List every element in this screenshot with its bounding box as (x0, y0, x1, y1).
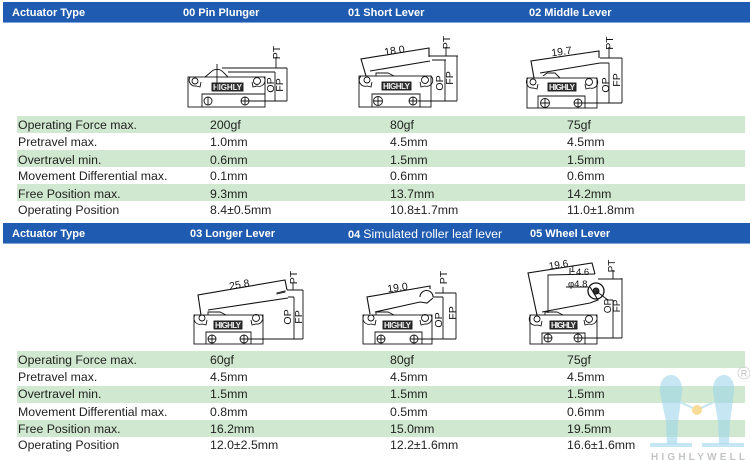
table: top specifications: 0.6mm (390, 169, 428, 183)
diagram: 05 wheel lever: HIGHLY (551, 321, 577, 330)
table: top specifications: 8.4±0.5mm (210, 203, 271, 217)
diagram: 01 short lever: PT (441, 35, 453, 49)
diagram: 04 simulated roller leaf lever: FP (447, 306, 459, 320)
header bar: bottom actuator types: 03 Longer Lever (190, 228, 275, 240)
header bar: top actuator types (3, 2, 750, 23)
table: bottom specifications: 4.5mm (390, 370, 428, 384)
diagram: 05 wheel lever: FP (612, 299, 623, 312)
diagram: 05 wheel lever: OP (603, 298, 614, 313)
diagram: 00 pin plunger: PT (271, 45, 283, 59)
table: bottom specifications: 16.2mm (210, 422, 254, 436)
diagram: 02 middle lever: HIGHLY (549, 83, 576, 92)
table: bottom specifications: 1.5mm (210, 387, 248, 401)
table: top specifications: Pretravel max. (18, 135, 97, 149)
header bar: bottom actuator types (3, 223, 750, 244)
table: top specifications: 1.5mm (390, 153, 428, 167)
table: top specifications: 1.5mm (567, 153, 605, 167)
header bar: top actuator types: 02 Middle Lever (529, 7, 612, 19)
table: top specifications: 10.8±1.7mm (390, 203, 458, 217)
header bar: top actuator types: 01 Short Lever (348, 7, 424, 19)
diagram: 01 short lever: HIGHLY (383, 82, 411, 91)
table: bottom specifications (17, 351, 745, 452)
diagram: 01 short lever: OP (434, 75, 446, 91)
table: bottom specifications: 0.8mm (210, 405, 248, 419)
table: bottom specifications: 0.6mm (567, 405, 605, 419)
diagram: 05 wheel lever: φ4.8 (568, 279, 587, 290)
table: bottom specifications: 60gf (210, 353, 234, 367)
table: top specifications: 4.5mm (567, 135, 605, 149)
table: top specifications: Overtravel min. (18, 153, 101, 167)
diagram: 00 pin plunger (188, 45, 287, 107)
diagram: 05 wheel lever: 1 (570, 264, 575, 275)
table: bottom specifications: 1.5mm (390, 387, 428, 401)
diagram: 03 longer lever: FP (293, 310, 305, 324)
table: top specifications (17, 116, 745, 217)
diagram: 03 longer lever: HIGHLY (215, 321, 242, 330)
diagram: 02 middle lever: OP (600, 77, 612, 93)
table: top specifications: 0.6mm (210, 153, 248, 167)
table: top specifications: 75gf (567, 118, 591, 132)
table: top specifications: 0.6mm (567, 169, 605, 183)
diagram: 01 short lever (359, 35, 458, 107)
header bar: top actuator types: 00 Pin Plunger (183, 7, 259, 19)
header bar: bottom actuator types: Actuator Type (12, 228, 85, 240)
header bar: bottom actuator types: 05 Wheel Lever (530, 228, 610, 240)
table: bottom specifications: Operating Position (18, 438, 119, 452)
table: top specifications: 11.0±1.8mm (567, 203, 634, 217)
table: bottom specifications: Free Position max. (18, 422, 121, 436)
table: top specifications: Operating Position (18, 203, 119, 217)
diagram: 02 middle lever (526, 36, 623, 108)
header bar: top actuator types: Actuator Type (12, 7, 85, 19)
table: bottom specifications: Operating Force max. (18, 353, 137, 367)
diagram: 00 pin plunger: HIGHLY (213, 83, 243, 92)
diagram: 04 simulated roller leaf lever: OP (433, 312, 445, 328)
diagram: 00 pin plunger: FP (274, 78, 286, 92)
table: bottom specifications: 0.5mm (390, 405, 428, 419)
diagram: 04 simulated roller leaf lever: HIGHLY (384, 321, 412, 330)
diagram: 04 simulated roller leaf lever: 19.0 (387, 281, 409, 295)
table: bottom specifications: Overtravel min. (18, 387, 101, 401)
table: top specifications: 200gf (210, 118, 241, 132)
logo: Highlywell watermark: R (741, 368, 748, 378)
table: bottom specifications: 12.0±2.5mm (210, 438, 278, 452)
diagram: 00 pin plunger: OP (265, 77, 277, 93)
table: top specifications: Free Position max. (18, 187, 121, 201)
table: top specifications: Movement Differential max. (18, 169, 167, 183)
table: top specifications: 80gf (390, 118, 414, 132)
table: bottom specifications: 1.5mm (567, 387, 605, 401)
diagram: 05 wheel lever (528, 259, 623, 344)
diagram: 05 wheel lever: 19.6 (548, 259, 570, 272)
diagram: 02 middle lever: PT (604, 36, 616, 50)
table: top specifications: 1.0mm (210, 135, 248, 149)
diagram: 03 longer lever (194, 270, 305, 344)
table: bottom specifications: 4.5mm (210, 370, 248, 384)
table: bottom specifications: 4.5mm (567, 370, 605, 384)
diagram: 03 longer lever: OP (282, 309, 294, 325)
table: top specifications: Operating Force max. (18, 118, 137, 132)
diagram: 05 wheel lever: 4.6 (576, 267, 589, 278)
table: bottom specifications: 19.5mm (567, 422, 611, 436)
table: top specifications: 13.7mm (390, 187, 434, 201)
table: bottom specifications: Movement Differential max. (18, 405, 167, 419)
diagram: 01 short lever: FP (444, 71, 456, 85)
table: bottom specifications: 80gf (390, 353, 414, 367)
diagram: 04 simulated roller leaf lever (363, 270, 459, 344)
table: bottom specifications: 16.6±1.6mm (567, 438, 635, 452)
diagram: 03 longer lever: PT (288, 270, 300, 284)
diagram: 02 middle lever: FP (611, 73, 623, 87)
diagram: 04 simulated roller leaf lever: PT (438, 270, 450, 284)
header bar: bottom actuator types: 04 Simulated roller leaf lever (348, 227, 502, 241)
table: bottom specifications: 75gf (567, 353, 591, 367)
table: bottom specifications: 12.2±1.6mm (390, 438, 458, 452)
table: top specifications: 9.3mm (210, 187, 248, 201)
table: top specifications: 14.2mm (567, 187, 611, 201)
table: top specifications: 0.1mm (210, 169, 248, 183)
logo: Highlywell watermark (650, 367, 750, 460)
diagram: 05 wheel lever: PT (607, 260, 618, 272)
diagram: 03 longer lever: 25.8 (228, 277, 251, 293)
diagram: 01 short lever: 18.0 (383, 43, 406, 59)
diagram: 02 middle lever: 19.7 (551, 45, 573, 59)
table: bottom specifications: 15.0mm (390, 422, 434, 436)
table: top specifications: 4.5mm (390, 135, 428, 149)
table: bottom specifications: Pretravel max. (18, 370, 97, 384)
